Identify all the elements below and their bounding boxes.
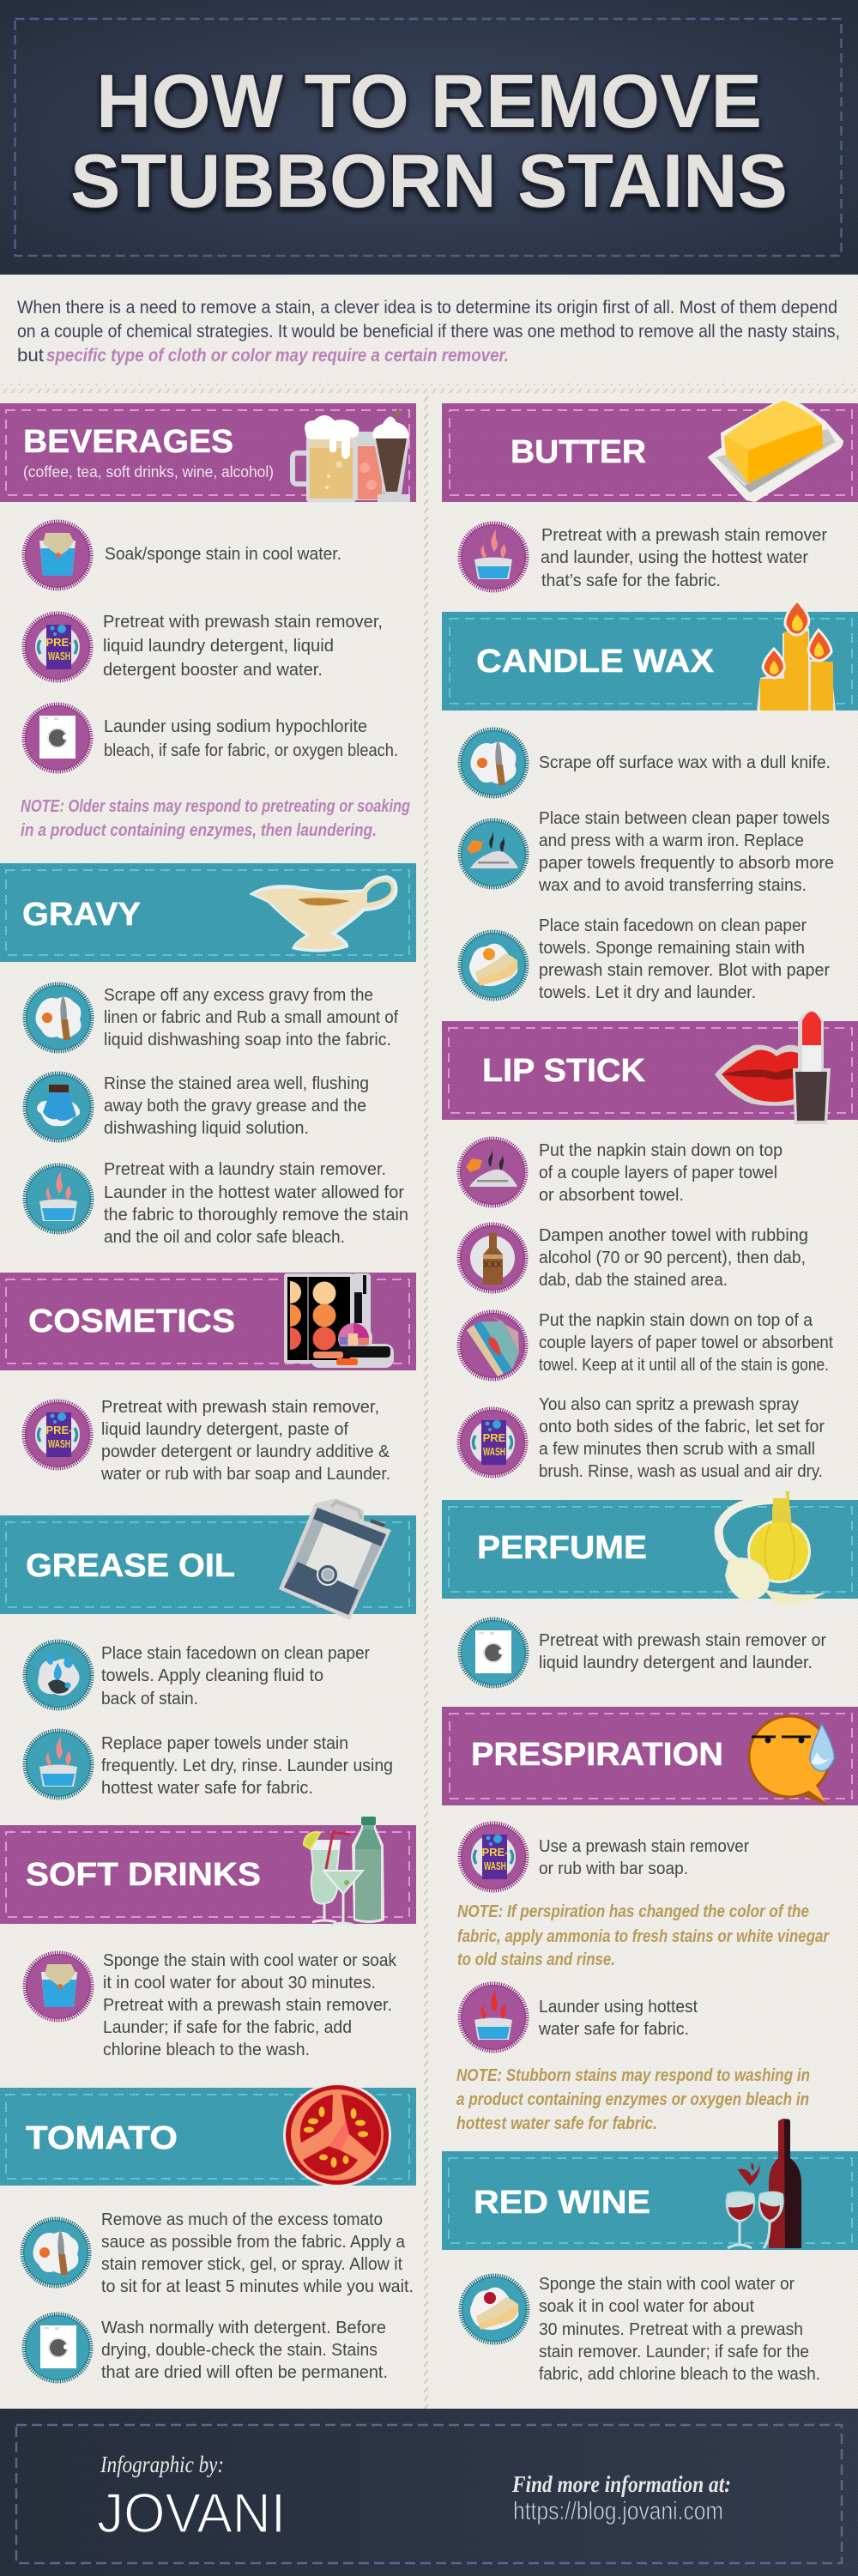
illustration: lips and lipstick	[715, 1011, 831, 1124]
step: prewash: WASH	[48, 1437, 70, 1450]
step: launder: bleach, if safe for fabric, or oxygen bleach.	[104, 741, 398, 760]
step: pretreat and launder: the fabric to thoroughly remove the stain	[104, 1205, 408, 1225]
step: scrape: Scrape off any excess gravy from the	[104, 985, 373, 1005]
note: color change	[457, 1902, 830, 1969]
credit: infographic by	[97, 2452, 286, 2544]
step: sponge: Pretreat with a prewash stain remover.	[103, 1995, 392, 2015]
step: remove excess	[22, 2210, 414, 2296]
note: stubborn stains	[456, 2066, 810, 2133]
step: rinse	[25, 1073, 369, 1140]
footer panel	[0, 2409, 858, 2576]
panel: gravy	[0, 863, 416, 1247]
step: paper towel layers	[459, 1310, 833, 1379]
step: launder	[460, 1984, 698, 2051]
banner: cosmetics	[0, 1273, 416, 1370]
step: scrape: liquid dishwashing soap into the fabric.	[104, 1030, 391, 1049]
banner: lip stick	[442, 1021, 858, 1120]
banner: prespiration: PRESPIRATION	[471, 1737, 723, 1773]
step: replace towels: hottest water safe for fabric.	[101, 1778, 313, 1798]
illustration: drinks	[293, 410, 410, 502]
note: older stains: NOTE: Older stains may respond to pretreating or soaking	[21, 797, 410, 816]
step: launder	[24, 704, 398, 771]
intro text: but	[17, 346, 44, 366]
step: sponge remaining: prewash stain remover. Blot with paper	[539, 960, 830, 980]
step: alcohol: alcohol (70 or 90 percent), then dab,	[539, 1248, 806, 1267]
step: spritz: WASH	[483, 1445, 505, 1458]
banner: lip stick: LIP STICK	[482, 1053, 646, 1089]
banner: grease oil	[0, 1515, 416, 1614]
banner: gravy: GRAVY	[22, 897, 141, 933]
banner: candle wax: CANDLE WAX	[476, 644, 715, 680]
step: pretreat: and launder, using the hottest water	[541, 547, 808, 567]
step: napkin: of a couple layers of paper towel	[539, 1163, 777, 1182]
step: prewash	[460, 1619, 826, 1686]
step: sponge: Sponge the stain with cool water or	[539, 2274, 795, 2294]
note: color change: to old stains and rinse.	[457, 1950, 615, 1969]
illustration: gravy boat	[249, 875, 397, 952]
intro text: specific type of cloth or color may require a certain remover.	[46, 346, 509, 366]
banner: butter: BUTTER	[511, 434, 646, 470]
step: alcohol: Dampen another towel with rubbing	[539, 1225, 808, 1245]
step: paper towel layers: Put the napkin stain down on top of a	[539, 1310, 813, 1330]
step: launder: Launder using sodium hypochlorite	[104, 717, 367, 736]
step: alcohol: XXX	[483, 1260, 503, 1270]
step: warm iron: Place stain between clean paper towels	[539, 808, 830, 828]
banner: prespiration	[442, 1707, 858, 1805]
title	[70, 58, 788, 223]
note: older stains	[21, 797, 410, 840]
step: remove excess: Remove as much of the excess tomato	[101, 2210, 383, 2229]
illustration: tomato	[283, 2083, 391, 2187]
banner: grease oil: GREASE OIL	[26, 1548, 235, 1584]
step: wash normally: drying, double-check the stain. Stains	[101, 2340, 378, 2360]
note: color change: NOTE: If perspiration has changed the color of the	[457, 1902, 809, 1921]
step: replace towels	[25, 1731, 393, 1798]
step: pretreat and launder: Pretreat with a laundry stain remover.	[104, 1159, 386, 1179]
step: spritz: PRE	[483, 1431, 506, 1444]
step: prewash	[460, 1823, 749, 1890]
banner: candle wax	[442, 612, 858, 711]
step: scrape	[460, 729, 831, 796]
step: place facedown: Place stain facedown on clean paper	[101, 1643, 370, 1663]
step: replace towels: Replace paper towels under stain	[101, 1733, 348, 1753]
banner: butter	[442, 403, 858, 502]
step: warm iron	[460, 808, 834, 895]
step: prewash: Pretreat with prewash stain remover,	[101, 1397, 379, 1417]
step: wash normally	[24, 2314, 388, 2382]
illustration: oil can	[279, 1498, 391, 1620]
credit: find more information: https://blog.jovani.com	[513, 2497, 723, 2525]
step: spritz: brush. Rinse, wash as usual and air dry.	[539, 1461, 823, 1481]
step: sponge: soak it in cool water for about	[539, 2296, 754, 2316]
step: prewash: detergent booster and water.	[103, 660, 323, 680]
panel: soft drinks	[0, 1817, 416, 2059]
title: HOW TO REMOVE	[96, 58, 762, 143]
step: sponge remaining: towels. Let it dry and launder.	[539, 983, 756, 1002]
illustration: soft drinks	[304, 1817, 384, 1926]
panel: beverages	[0, 403, 416, 840]
banner: beverages: BEVERAGES	[23, 424, 233, 460]
step: sponge: Launder; if safe for the fabric, add	[103, 2017, 352, 2037]
credit: infographic by: JOVANI	[97, 2482, 286, 2544]
step: napkin: Put the napkin stain down on top	[539, 1140, 782, 1160]
banner: soft drinks: SOFT DRINKS	[26, 1857, 261, 1893]
note: older stains: in a product containing enzymes, then laundering.	[21, 821, 377, 840]
step: rinse: away both the gravy grease and the	[104, 1096, 366, 1116]
step: replace towels: frequently. Let dry, rinse. Launder using	[101, 1756, 393, 1775]
banner: soft drinks	[0, 1825, 416, 1924]
title: STUBBORN STAINS	[70, 138, 788, 223]
step: place facedown	[25, 1642, 370, 1708]
credit: find more information	[511, 2471, 731, 2525]
step: warm iron: wax and to avoid transferring stains.	[538, 875, 807, 895]
banner: tomato: TOMATO	[26, 2120, 178, 2156]
panel: butter	[442, 399, 858, 590]
step: prewash: liquid laundry detergent and launder.	[539, 1653, 813, 1672]
illustration: candles	[757, 601, 836, 711]
step: warm iron: and press with a warm iron. Replace	[539, 831, 804, 850]
step: pretreat and launder: Launder in the hottest water allowed for	[104, 1182, 404, 1202]
header panel	[0, 0, 858, 275]
panel: lip stick	[442, 1011, 858, 1481]
step: sponge: 30 minutes. Pretreat with a prewash	[539, 2319, 803, 2339]
step: place facedown: towels. Apply cleaning fluid to	[101, 1666, 323, 1685]
step: napkin	[459, 1139, 782, 1206]
step: pretreat	[460, 523, 827, 590]
illustration: perfume bottle	[719, 1491, 825, 1605]
banner: red wine: RED WINE	[474, 2185, 650, 2221]
step: alcohol: dab, dab the stained area.	[539, 1270, 728, 1290]
step: scrape: Scrape off surface wax with a dull knife.	[539, 753, 831, 772]
step: remove excess: to sit for at least 5 minutes while you wait.	[101, 2277, 414, 2296]
step: scrape	[25, 984, 398, 1051]
step: napkin: or absorbent towel.	[539, 1185, 684, 1205]
note: stubborn stains: hottest water safe for fabric.	[456, 2114, 657, 2133]
illustration: sweating face	[749, 1716, 834, 1805]
step: sponge	[461, 2274, 820, 2384]
step: prewash: Use a prewash stain remover	[539, 1836, 749, 1856]
panel: perfume	[442, 1491, 858, 1686]
step: prewash: PRE-	[45, 636, 73, 649]
step: prewash: PRE-	[481, 1846, 509, 1859]
panel: red wine	[442, 2119, 858, 2384]
step: spritz: a few minutes then scrub with a small	[539, 1439, 815, 1459]
step: prewash: liquid laundry detergent, liquid	[103, 636, 334, 656]
step: launder: Launder using hottest	[539, 1997, 698, 2017]
step: wash normally: that are dried will often be permanent.	[101, 2362, 388, 2382]
illustration: wine bottle and glasses	[727, 2119, 801, 2248]
step: prewash: liquid laundry detergent, paste of	[101, 1419, 348, 1439]
step: pretreat: Pretreat with a prewash stain remover	[541, 525, 827, 545]
step: prewash: WASH	[484, 1859, 506, 1872]
step: prewash: or rub with bar soap.	[539, 1859, 688, 1878]
step: prewash: water or rub with bar soap and Launder.	[100, 1464, 390, 1484]
step: launder: water safe for fabric.	[538, 2019, 689, 2039]
step: spritz	[459, 1394, 825, 1481]
step: prewash: Pretreat with prewash stain remover,	[103, 612, 383, 632]
step: soak: Soak/sponge stain in cool water.	[105, 544, 341, 564]
step: prewash: WASH	[48, 650, 70, 662]
step: paper towel layers: couple layers of paper towel or absorbent	[539, 1333, 833, 1352]
intro text	[17, 298, 840, 366]
step: sponge: fabric, add chlorine bleach to the wash.	[539, 2364, 820, 2384]
step: scrape: linen or fabric and Rub a small amount of	[104, 1007, 398, 1027]
step: spritz: You also can spritz a prewash spray	[539, 1394, 800, 1414]
note: stubborn stains: a product containing enzymes or oxygen bleach in	[456, 2090, 809, 2109]
step: sponge: Sponge the stain with cool water or soak	[103, 1950, 397, 1970]
step: prewash: powder detergent or laundry additive &	[101, 1442, 390, 1461]
panel: prespiration	[442, 1707, 858, 2133]
banner: cosmetics: COSMETICS	[28, 1303, 235, 1339]
step: pretreat and launder	[25, 1159, 408, 1247]
credit: find more information: Find more information at:	[511, 2471, 731, 2497]
step: rinse: dishwashing liquid solution.	[104, 1118, 309, 1138]
step: rinse: Rinse the stained area well, flushing	[104, 1073, 369, 1093]
step: sponge remaining: Place stain facedown on clean paper	[539, 916, 807, 935]
step: place facedown: back of stain.	[101, 1689, 198, 1708]
banner: beverages	[0, 403, 416, 502]
step: prewash: Pretreat with prewash stain remover or	[539, 1630, 826, 1650]
panel: candle wax	[442, 601, 858, 1002]
step: prewash: PRE-	[45, 1424, 73, 1436]
banner: tomato	[0, 2088, 416, 2186]
step: sponge	[25, 1950, 397, 2059]
banner: perfume	[442, 1500, 858, 1599]
illustration: makeup	[284, 1273, 394, 1368]
panel: grease oil	[0, 1498, 416, 1798]
step: soak	[24, 522, 341, 589]
banner: red wine	[442, 2151, 858, 2250]
step: sponge remaining: towels. Sponge remaining stain with	[539, 938, 805, 958]
illustration: butter dish	[709, 399, 843, 501]
step: prewash	[24, 612, 383, 680]
step: remove excess: sauce as possible from the fabric. Apply a	[101, 2232, 406, 2252]
step: sponge: it in cool water for about 30 minutes.	[103, 1973, 376, 1992]
panel: cosmetics	[0, 1273, 416, 1484]
banner: beverages: (coffee, tea, soft drinks, wine, alcohol)	[23, 463, 274, 481]
step: sponge remaining	[460, 916, 830, 1002]
step: wash normally: Wash normally with detergent. Before	[101, 2318, 386, 2337]
banner: gravy	[0, 863, 416, 962]
step: alcohol	[459, 1225, 808, 1291]
step: spritz: onto both sides of the fabric, let set for	[539, 1417, 825, 1436]
step: pretreat and launder: and the oil and color safe bleach.	[104, 1227, 345, 1247]
panel: tomato	[0, 2083, 416, 2382]
step: warm iron: paper towels frequently to absorb more	[539, 853, 834, 873]
step: remove excess: stain remover stick, gel, or spray. Allow it	[101, 2254, 402, 2274]
step: pretreat: that’s safe for the fabric.	[541, 571, 721, 590]
credit: infographic by: Infographic by:	[100, 2452, 224, 2477]
step: sponge: stain remover. Launder; if safe for the	[539, 2342, 809, 2361]
step: sponge: chlorine bleach to the wash.	[103, 2040, 310, 2059]
step: prewash	[24, 1397, 390, 1484]
banner: perfume: PERFUME	[477, 1530, 647, 1566]
